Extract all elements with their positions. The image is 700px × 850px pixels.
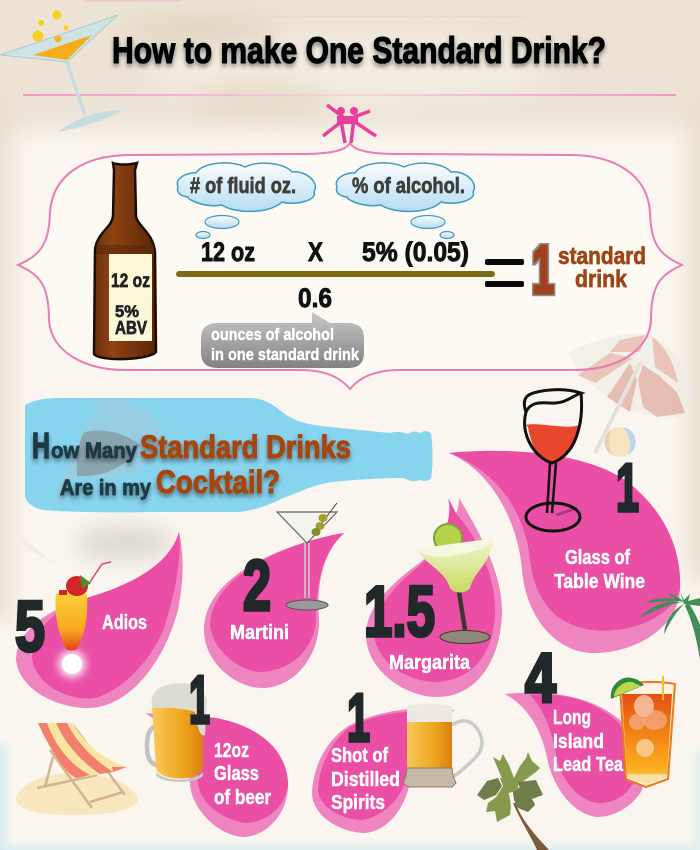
label: Distilled (331, 769, 400, 791)
frame: ornamental pink border (18, 143, 682, 389)
result: one standard drink (532, 232, 646, 308)
illustration: palm tree upper right (640, 592, 700, 660)
number: 1.5 (364, 573, 435, 652)
banner: blue bottle heading: Standard Drinks (140, 429, 351, 465)
result: one standard drink: 1 (532, 232, 554, 308)
smudge behind adios (75, 528, 175, 558)
result: one standard drink: drink (575, 266, 628, 293)
formula result value: 0.6 (298, 283, 332, 313)
illustration: faded beach umbrella and ball (540, 320, 691, 457)
label: Margarita (389, 652, 471, 674)
number: 2 (243, 547, 271, 626)
number: 1 (347, 680, 370, 756)
number: 1 (616, 450, 639, 526)
icon: glass beer mug (403, 704, 482, 787)
panel: standard drink formula (18, 105, 682, 389)
formula numerator (201, 237, 469, 267)
label (553, 707, 624, 776)
illustration: faint leaf shape (2, 527, 55, 565)
formula divider bar (176, 271, 495, 277)
label (214, 740, 271, 809)
icon: martini glass (277, 503, 337, 610)
cloud: percent of alcohol: % of alcohol. (352, 173, 465, 198)
formula numerator: 12 oz (201, 237, 255, 267)
icon: iced tea glass (611, 676, 675, 787)
number: 1 (189, 662, 210, 738)
label: Adios (102, 612, 147, 634)
illustration: deck chair on sand (16, 723, 138, 815)
icon: adios cocktail (55, 562, 111, 678)
cloud: percent of alcohol (336, 163, 474, 238)
label: Glass (214, 763, 259, 785)
panel: long island lead tea (505, 639, 675, 817)
label: Lead Tea (553, 754, 624, 776)
label: Long (553, 707, 591, 729)
panel: distilled spirits (312, 680, 482, 833)
icon: beer bottle: 12 oz (111, 271, 150, 292)
label: Shot of (331, 745, 388, 767)
banner: blue bottle heading (25, 398, 432, 512)
formula numerator: 5% (0.05) (362, 237, 469, 267)
label: Martini (230, 622, 289, 644)
label: Glass of (565, 547, 630, 569)
banner: blue bottle heading: H (32, 425, 50, 466)
callout: ounces of alcohol (201, 312, 364, 368)
banner: blue bottle heading: ow Many (51, 438, 138, 463)
label: 12oz (214, 740, 249, 762)
icon: beer mug (147, 683, 207, 782)
icon: martini glass top left (0, 10, 123, 132)
bottle shape (25, 398, 432, 512)
formula numerator: X (308, 237, 323, 267)
icon: margarita glass (417, 524, 493, 644)
panel: table wine (449, 390, 680, 653)
callout: ounces of alcohol: ounces of alcohol (211, 325, 334, 344)
icon: beer bottle (94, 163, 156, 359)
icon: beer bottle: ABV (115, 318, 147, 338)
icon: two people cheering (323, 105, 376, 143)
illustration: palm tree bottom (477, 752, 549, 850)
number: 4 (525, 639, 556, 717)
panel: twelve ounce beer (145, 662, 288, 837)
cloud: number of fluid ounces: # of fluid oz. (190, 173, 296, 198)
callout: ounces of alcohol: in one standard drink (211, 345, 359, 364)
banner: blue bottle heading: Are in my (60, 475, 152, 500)
panel: margarita (364, 498, 502, 697)
label (331, 745, 400, 814)
label: of beer (214, 787, 271, 809)
cloud: number of fluid ounces (177, 163, 315, 238)
label: Table Wine (554, 571, 645, 593)
label: Spirits (331, 792, 385, 814)
label (554, 547, 645, 593)
icon: wine glass (524, 390, 582, 531)
panel: adios (15, 532, 183, 708)
number: 5 (15, 588, 45, 667)
label: Island (553, 731, 604, 753)
panel: martini (204, 503, 344, 688)
banner: blue bottle heading: Cocktail? (156, 464, 280, 500)
icon: beer bottle: 5% (115, 302, 139, 321)
result: one standard drink: standard (558, 243, 646, 270)
decorative header lines (23, 0, 676, 96)
equals sign (485, 259, 524, 287)
